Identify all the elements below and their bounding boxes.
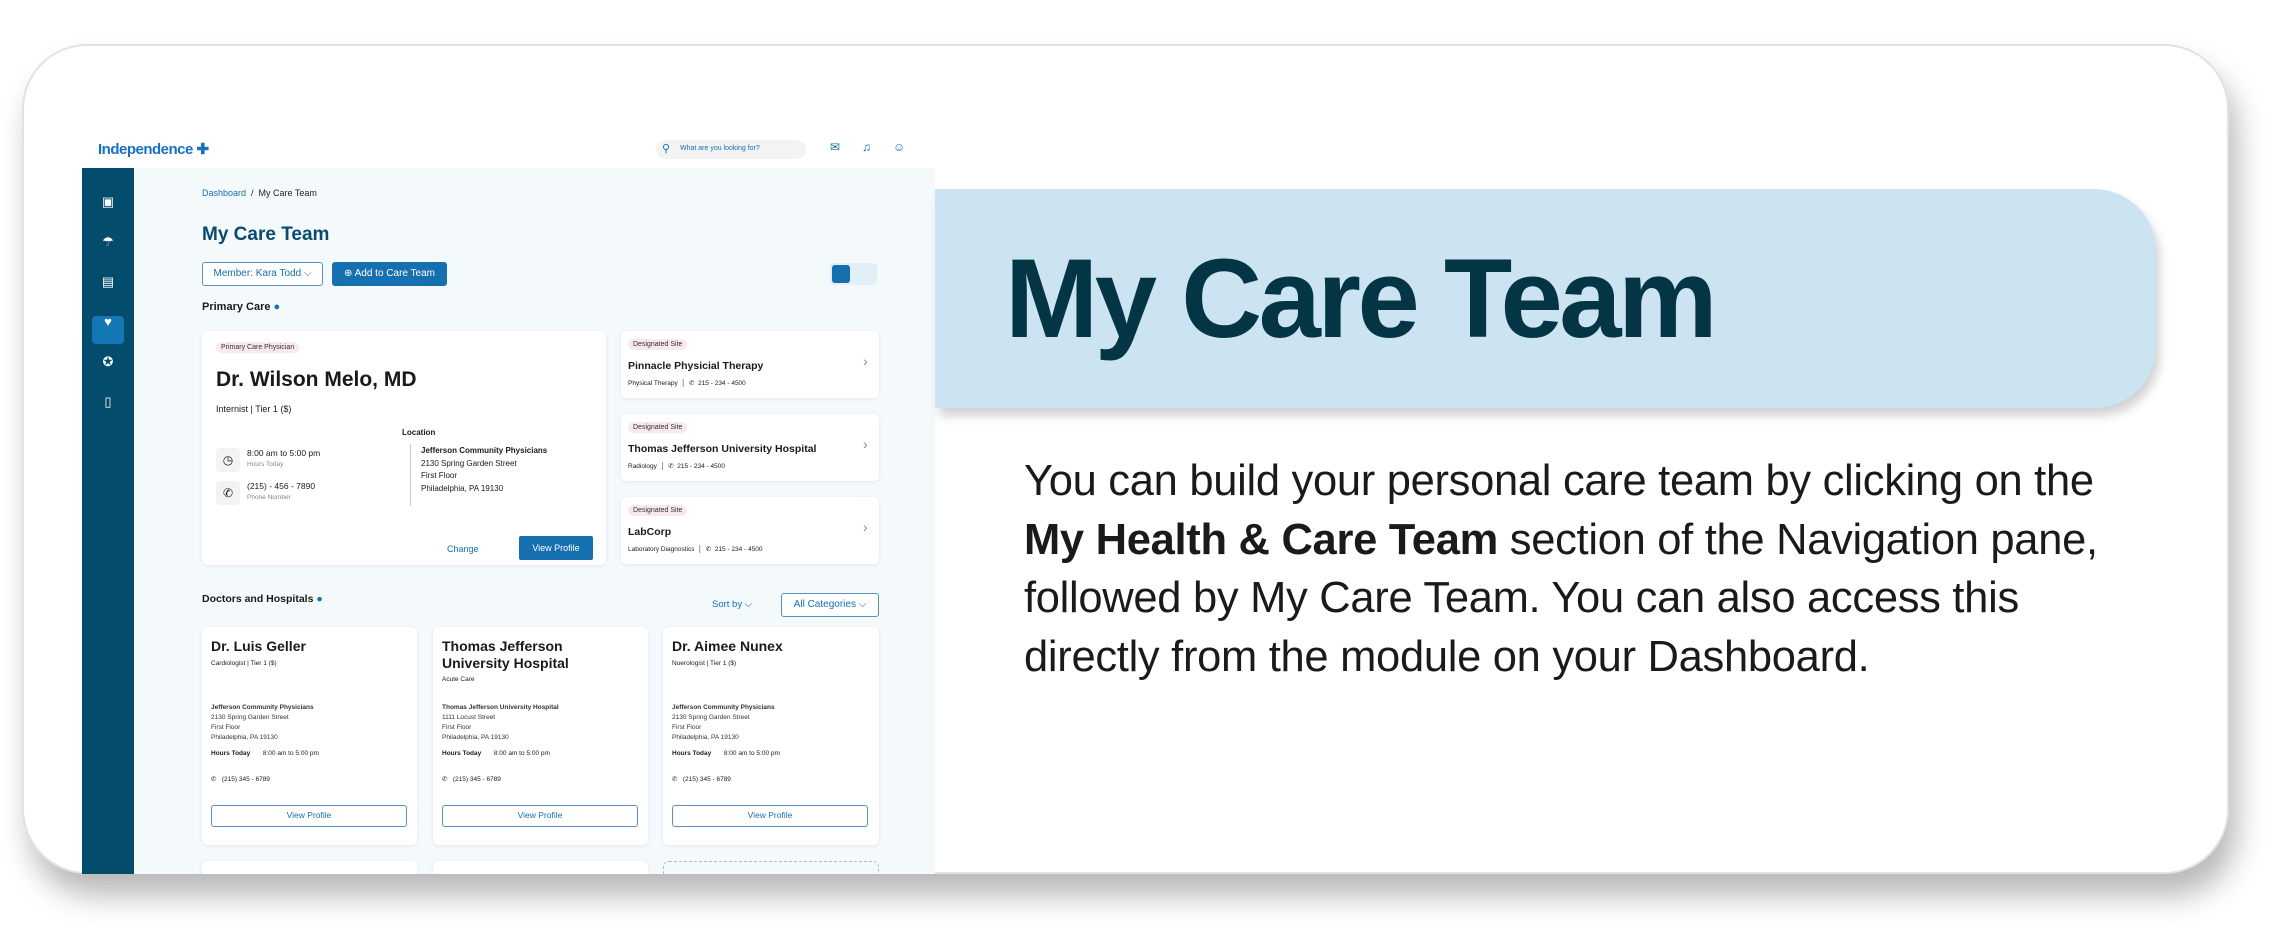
doctor card: hospital: Philadelphia, PA 19130 [442, 734, 509, 741]
doctor card: geller: Dr. Luis Geller [211, 638, 306, 654]
designated site: pinnacle: › [863, 353, 868, 369]
primary card: Internist | Tier 1 ($) [216, 404, 291, 414]
search [656, 140, 806, 159]
doctor card: geller: ✆ (215) 345 - 6789 [211, 776, 270, 783]
primary card: Phone Number [247, 494, 291, 501]
designated site: thomas jefferson: › [863, 436, 868, 452]
doctor card: hospital: First Floor [442, 724, 471, 731]
page heading: My Care Team [202, 224, 329, 245]
doctor card: geller: Philadelphia, PA 19130 [211, 734, 278, 741]
doctor card: nunex: ✆ (215) 345 - 6789 [672, 776, 731, 783]
doctor card: nunex: First Floor [672, 724, 701, 731]
title banner [935, 189, 2156, 408]
search: ⚲ [662, 143, 670, 155]
primary card: View Profile [532, 543, 580, 553]
doctor card: hospital: ✆ (215) 345 - 6789 [442, 776, 501, 783]
doctor card: geller: View Profile [287, 810, 331, 820]
primary card: 8:00 am to 5:00 pm [247, 448, 320, 458]
primary card: Change [447, 544, 479, 554]
doctor card: nunex: Nuerologist | Tier 1 ($) [672, 660, 736, 667]
doctor card: geller: Cardiologist | Tier 1 ($) [211, 660, 277, 667]
doctor card: hospital: Thomas Jefferson University Hospital [442, 704, 559, 711]
primary card: First Floor [421, 471, 457, 480]
designated site: labcorp: Laboratory Diagnostics │ ✆ 215 - 234 - 4500 [628, 546, 763, 553]
sidebar: ▤ [102, 274, 114, 289]
sidebar: ▣ [102, 194, 114, 209]
doctor card: hospital [433, 627, 648, 845]
designated site: labcorp: › [863, 519, 868, 535]
primary card: Primary Care Physician [221, 344, 294, 351]
doctor card: hospital: Thomas Jefferson [442, 638, 563, 654]
screenshot: app [82, 140, 935, 874]
doctors heading: Doctors and Hospitals ● [202, 593, 323, 605]
designated site: pinnacle [621, 331, 879, 398]
doctor card: hospital: University Hospital [442, 655, 569, 671]
sidebar: ▯ [104, 394, 112, 409]
doctor card: nunex: Jefferson Community Physicians [672, 704, 775, 711]
primary card: ✆ [223, 486, 233, 500]
doctor card: hospital: 1111 Locust Street [442, 714, 495, 721]
doctor card: nunex [663, 627, 879, 845]
content: ⊕ Add to Care Team [344, 268, 435, 279]
doctor card: hospital: Hours Today 8:00 am to 5:00 pm [442, 750, 550, 757]
doctor card: geller: 2130 Spring Garden Street [211, 714, 289, 721]
primary card: Location [402, 428, 435, 437]
designated site: pinnacle: Designated Site [633, 341, 682, 348]
doctor card: nunex: 2130 Spring Garden Street [672, 714, 750, 721]
sidebar: ♥ [104, 314, 112, 329]
designated site: thomas jefferson: Thomas Jefferson University Hospital [628, 443, 816, 455]
designated site: pinnacle: Pinnacle Physicial Therapy [628, 360, 763, 372]
description text: You can build your personal care team by clicking on the [1024, 457, 2094, 505]
description text [1024, 457, 2098, 681]
primary card [202, 331, 606, 565]
sidebar: ☂ [102, 234, 114, 249]
doctor card: geller: First Floor [211, 724, 240, 731]
primary card: Dr. Wilson Melo, MD [216, 368, 416, 391]
designated site: thomas jefferson: Radiology │ ✆ 215 - 234 - 4500 [628, 463, 725, 470]
doctor card: hospital: Acute Care [442, 676, 475, 683]
doctor card: geller [202, 627, 417, 845]
designated site: labcorp: LabCorp [628, 526, 671, 538]
primary card: Philadelphia, PA 19130 [421, 484, 503, 492]
description text: followed by My Care Team. You can also access this [1024, 574, 2019, 622]
breadcrumb: Dashboard / My Care Team [202, 188, 317, 198]
logo: Independence ✚ [98, 141, 209, 158]
doctor card: nunex: View Profile [748, 810, 792, 820]
primary card: Hours Today [247, 461, 283, 468]
content: All Categories ⌵ [794, 599, 866, 610]
sidebar [82, 168, 134, 888]
content: Sort by ⌵ [712, 599, 752, 610]
doctor card: nunex: Dr. Aimee Nunex [672, 638, 783, 654]
buttons [202, 262, 323, 286]
primary card: 2130 Spring Garden Street [421, 458, 517, 468]
primary card: Jefferson Community Physicians [421, 446, 547, 455]
designated site: labcorp: Designated Site [633, 507, 682, 514]
designated site: labcorp [621, 497, 879, 564]
doctor card: geller: Jefferson Community Physicians [211, 704, 314, 711]
primary care label: Primary Care ● [202, 301, 280, 313]
doctor card: hospital: View Profile [518, 810, 562, 820]
primary card: (215) - 456 - 7890 [247, 481, 315, 491]
view toggle [830, 263, 877, 285]
title: My Care Team [1005, 236, 1714, 361]
doctor card: nunex: Hours Today 8:00 am to 5:00 pm [672, 750, 780, 757]
search: What are you looking for? [680, 145, 760, 152]
description text: directly from the module on your Dashboard. [1024, 633, 1869, 681]
doctor card: nunex: Philadelphia, PA 19130 [672, 734, 739, 741]
primary card: ◷ [223, 453, 233, 467]
description text: My Health & Care Team section of the Navigation pane, [1024, 516, 2098, 564]
sidebar: ✪ [103, 354, 113, 369]
designated site: thomas jefferson [621, 414, 879, 481]
content [134, 168, 935, 888]
designated site: thomas jefferson: Designated Site [633, 424, 682, 431]
doctor card: geller: Hours Today 8:00 am to 5:00 pm [211, 750, 319, 757]
buttons: Member: Kara Todd ⌵ [214, 268, 312, 279]
designated site: pinnacle: Physical Therapy │ ✆ 215 - 234 - 4500 [628, 380, 746, 387]
header icons: ✉♫☺ [830, 140, 927, 154]
